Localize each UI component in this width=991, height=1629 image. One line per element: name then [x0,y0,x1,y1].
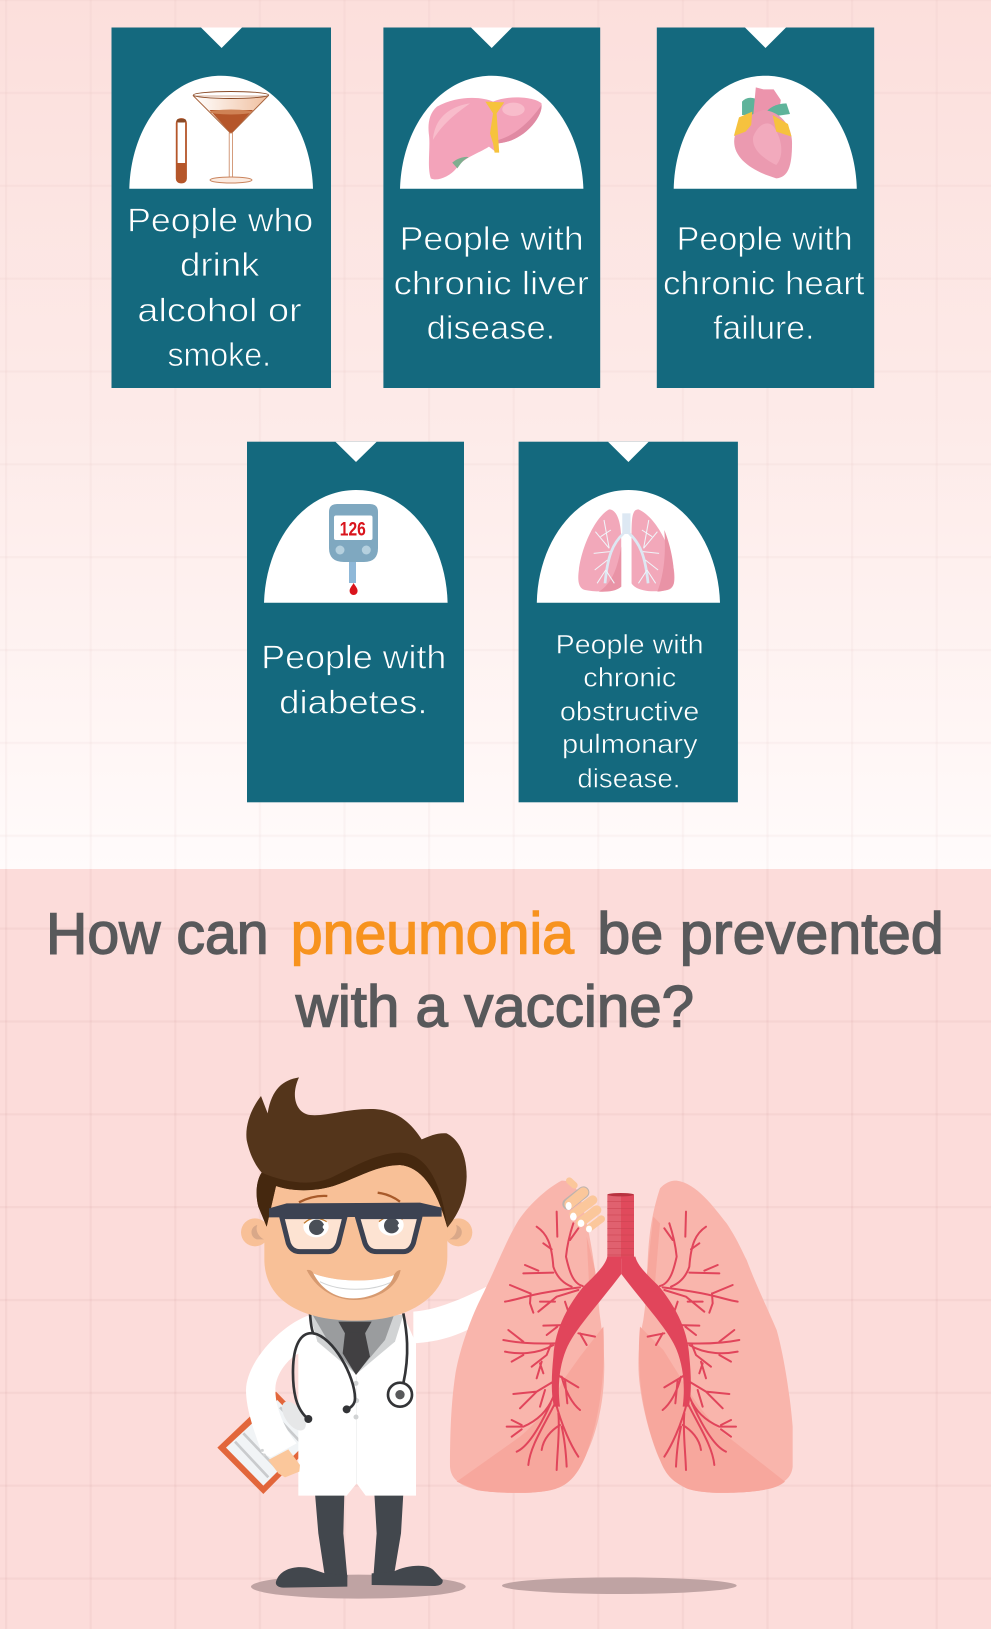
eyes [303,1216,329,1237]
hair [246,1077,467,1228]
text: people with chronic heart failure: chronic heart [663,264,864,301]
panel: chronic liver disease [383,28,600,388]
icon: glucose meter: 126 [340,520,366,541]
text: people with chronic obstructive pulmonary disease: obstructive [560,697,699,727]
bronchial tree [503,1212,739,1470]
text: people who drink alcohol or smoke: smoke. [168,336,271,373]
icon: glucose meter [264,490,448,603]
text: people with diabetes: People with [261,638,446,675]
panel: diabetes [247,442,464,802]
text: people with chronic heart failure: failure. [713,309,814,346]
text: people who drink alcohol or smoke: People who [127,202,313,239]
text: people with chronic liver disease [394,220,589,346]
text: people who drink alcohol or smoke [127,202,313,373]
text: people with chronic liver disease: chronic liver [394,264,589,301]
doctor's hand on lung [566,1181,601,1232]
text: people who drink alcohol or smoke: drink [180,246,260,283]
arm raised [413,1287,487,1343]
text: people with chronic obstructive pulmonary disease: pulmonary [562,729,698,759]
text: people with chronic heart failure [663,220,864,346]
right lung [638,1181,793,1493]
heading: how can pneumonia be prevented with a vaccine: be prevented [597,901,944,966]
icon: liver [400,76,583,189]
text: people who drink alcohol or smoke: alcohol or [137,292,302,329]
lab coat [298,1315,416,1496]
panel: alcohol or smoke [112,28,331,388]
text: people with chronic heart failure: People with [677,220,853,257]
icon: cigarette and cocktail [129,76,313,189]
text: people with diabetes [261,638,446,720]
text: people with chronic obstructive pulmonary disease: chronic [583,663,676,693]
eyebrows [299,1193,400,1202]
trachea [607,1193,634,1259]
icon: lungs [537,490,720,603]
text: people with chronic obstructive pulmonary disease: People with [556,629,704,659]
doctor head [241,1077,472,1321]
collar and tie [310,1315,403,1374]
left lung [450,1181,604,1493]
illustration: lungs held by the doctor [450,1181,793,1594]
text: people with chronic obstructive pulmonary disease: disease. [577,763,680,793]
stethoscope [293,1313,407,1419]
heading: how can pneumonia be prevented with a vaccine [46,901,944,1040]
heading: how can pneumonia be prevented with a vaccine: How can [46,901,269,966]
smile [307,1270,401,1300]
heading: how can pneumonia be prevented with a vaccine: with a vaccine? [295,975,694,1040]
heading: how can pneumonia be prevented with a vaccine: pneumonia [291,901,575,966]
text: people with chronic liver disease: People with [400,220,584,257]
doctor body [217,1287,487,1599]
icon: heart [674,76,857,189]
lungs shadow [502,1577,737,1594]
illustration: doctor [217,1077,487,1599]
text: people with diabetes: diabetes. [279,683,428,720]
glasses [269,1203,442,1252]
glasses lenses [282,1217,420,1252]
hand holding clipboard [268,1449,300,1477]
clipboard [217,1392,320,1494]
text: people with chronic liver disease: disease. [427,309,555,346]
panel: chronic heart failure [657,28,874,388]
panel: chronic obstructive pulmonary disease [519,442,738,802]
text: people with chronic obstructive pulmonary disease [556,629,704,793]
